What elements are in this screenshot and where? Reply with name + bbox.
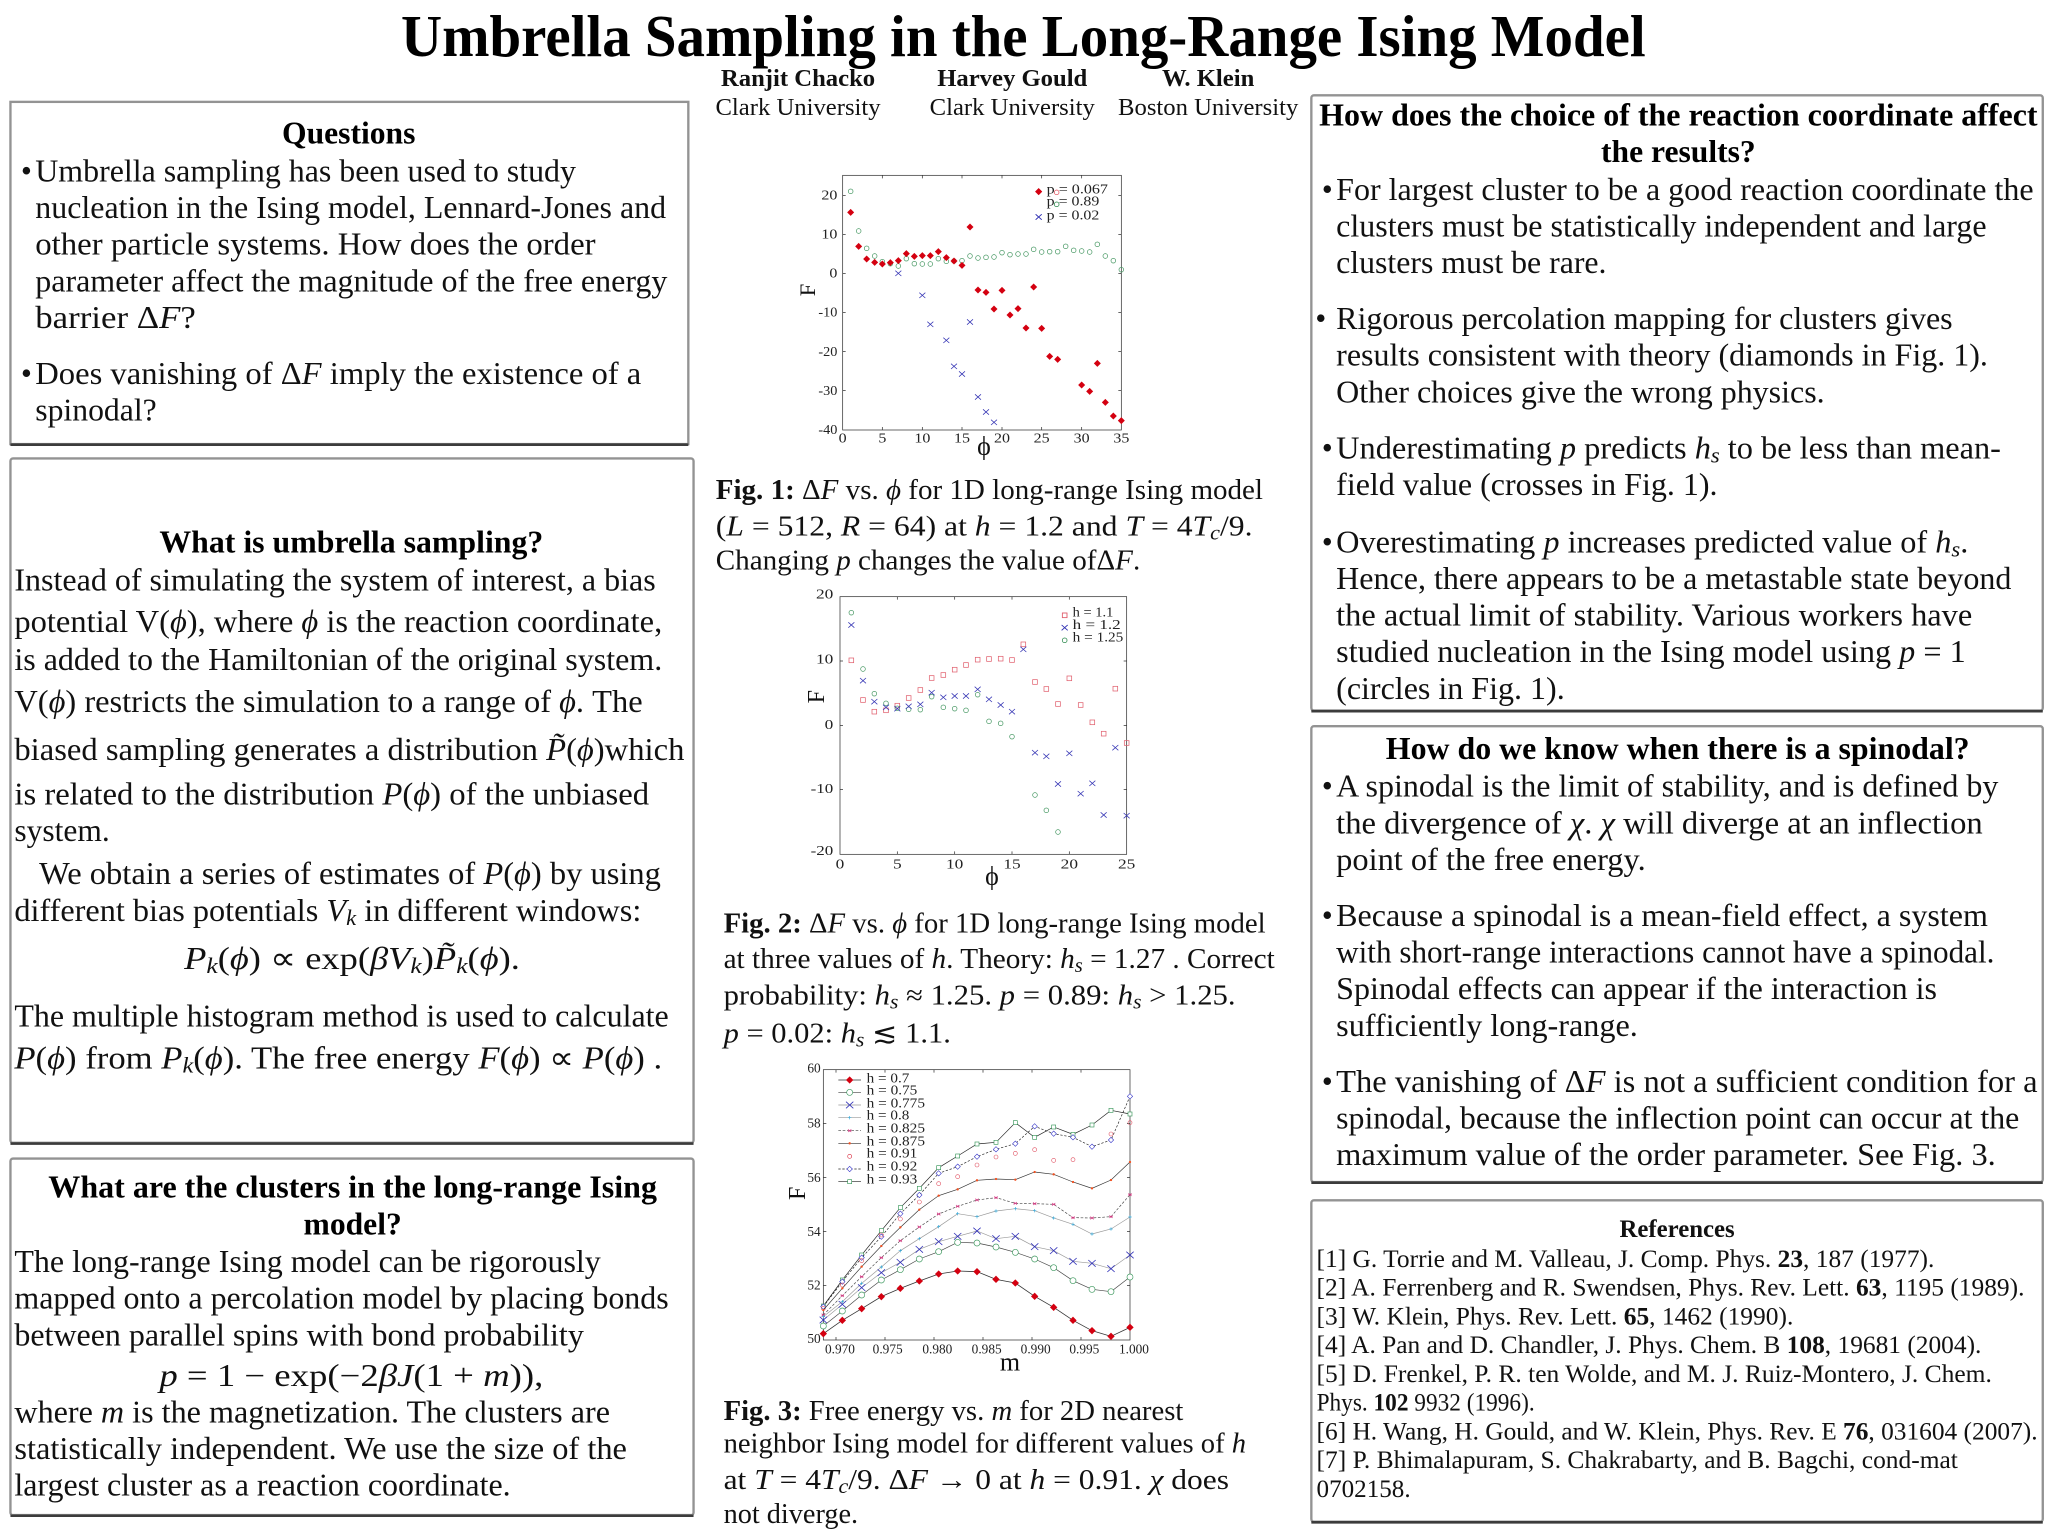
caption: figure 3: neighbor Ising model for different values of h bbox=[724, 1428, 1246, 1459]
panel: questions: • bbox=[21, 154, 32, 189]
figure 2 scatter chart: 15 bbox=[1003, 856, 1021, 871]
figure 1 scatter chart: ϕ bbox=[977, 432, 991, 461]
figure 3 line chart: 58 bbox=[807, 1115, 821, 1130]
figure 3 line chart: 0.985 bbox=[972, 1341, 1002, 1356]
figure 1 scatter chart: p = 0.89 bbox=[1047, 194, 1100, 209]
panel: spinodal: sufficiently long-range. bbox=[1336, 1008, 1638, 1043]
figure 2 scatter chart: h = 1.2 bbox=[1073, 617, 1121, 632]
panel: reaction coordinate: (circles in Fig. 1). bbox=[1336, 671, 1565, 706]
figure 3 line chart: 52 bbox=[807, 1278, 821, 1293]
panel: references bbox=[1311, 1200, 2043, 1522]
panel: clusters: statistically independent. We use the size of the bbox=[14, 1431, 627, 1466]
panel: spinodal: spinodal, because the inflection point can occur at the bbox=[1336, 1100, 2019, 1135]
panel: what is umbrella sampling: Instead of simulating the system of interest, a bias bbox=[14, 562, 656, 597]
panel: reaction coordinate: Hence, there appears to be a metastable state beyond bbox=[1336, 561, 2012, 596]
panel: what is umbrella sampling: We obtain a series of estimates of P(ϕ) by using bbox=[39, 856, 661, 891]
figure 1 scatter chart: 10 bbox=[821, 227, 838, 242]
panel: questions: • bbox=[21, 356, 32, 391]
panel: questions bbox=[10, 102, 688, 445]
panel: spinodal bbox=[1311, 726, 2043, 1183]
caption: figure 2 bbox=[721, 909, 1275, 1051]
figure 3 line chart: 0.970 bbox=[825, 1341, 855, 1356]
figure 1 scatter chart: -10 bbox=[818, 305, 838, 320]
panel: questions: other particle systems. How does the order bbox=[35, 227, 596, 262]
panel: clusters: What are the clusters in the long-range Ising bbox=[48, 1170, 657, 1205]
caption: figure 1: Changing p changes the value ofΔ F. bbox=[716, 545, 1140, 576]
panel: questions: Questions bbox=[282, 116, 415, 151]
figure 2 scatter chart: 25 bbox=[1118, 856, 1136, 871]
panel: reaction coordinate: studied nucleation in the Ising model using p = 1 bbox=[1336, 634, 1966, 669]
panel: what is umbrella sampling: different bias potentials Vk in different windows: bbox=[14, 893, 641, 930]
panel: clusters: model? bbox=[304, 1206, 402, 1241]
figure 1 scatter chart: 35 bbox=[1113, 431, 1130, 446]
panel: reaction coordinate: the actual limit of stability. Various workers have bbox=[1336, 598, 1972, 633]
panel: reaction coordinate: • bbox=[1322, 524, 1333, 559]
panel: questions: Umbrella sampling has been used to study bbox=[35, 154, 576, 189]
panel: questions: spinodal? bbox=[35, 393, 157, 428]
figure 2 scatter chart: h = 1.25 bbox=[1073, 630, 1124, 645]
figure 3 line chart: 54 bbox=[807, 1224, 821, 1239]
panel: references: Phys. 102 9932 (1996). bbox=[1317, 1390, 1535, 1417]
panel: spinodal: with short-range interactions cannot have a spinodal. bbox=[1336, 935, 1994, 970]
panel: clusters: The long-range Ising model can be rigorously bbox=[14, 1244, 601, 1279]
panel: questions: barrier Δ F? bbox=[35, 300, 196, 335]
authors: Clark University bbox=[715, 94, 881, 121]
figure 1 scatter chart: -40 bbox=[818, 422, 838, 437]
panel: questions: Does vanishing of Δ F imply the existence of a bbox=[35, 356, 641, 391]
panel: reaction coordinate: • bbox=[1322, 172, 1333, 207]
figure 1 scatter chart: -20 bbox=[818, 344, 838, 359]
title: Umbrella Sampling in the Long-Range Ising Model bbox=[401, 4, 1646, 69]
figure 3 line chart: F bbox=[785, 1187, 811, 1200]
panel: spinodal: the divergence of χ. χ will diverge at an inflection bbox=[1336, 805, 1983, 840]
panel: questions: parameter affect the magnitude of the free energy bbox=[35, 263, 668, 298]
panel: references: [4] A. Pan and D. Chandler, J. Phys. Chem. B 108, 19681 (2004). bbox=[1317, 1332, 1981, 1359]
caption: figure 1: Fig. 1: ΔF vs. ϕ for 1D long-range Ising model bbox=[716, 475, 1263, 506]
figure 1 scatter chart: 15 bbox=[954, 431, 970, 446]
panel: clusters: p = 1 − exp(−2 βJ(1 + m)), bbox=[157, 1358, 543, 1393]
figure 2 scatter chart: 20 bbox=[1061, 856, 1078, 871]
panel: what is umbrella sampling: The multiple histogram method is used to calculate bbox=[14, 999, 669, 1034]
panel: clusters: between parallel spins with bond probability bbox=[14, 1317, 584, 1352]
panel: reaction coordinate: Underestimating p predicts hs to be less than mean- bbox=[1336, 430, 2001, 467]
authors: W. Klein bbox=[1162, 65, 1255, 92]
figure 2 scatter chart: 20 bbox=[816, 586, 834, 601]
caption: figure 2: p = 0.02: hs ≲ 1.1. bbox=[721, 1018, 951, 1051]
figure 3 line chart: h = 0.825 bbox=[867, 1120, 925, 1135]
panel: clusters: largest cluster as a reaction coordinate. bbox=[14, 1468, 511, 1503]
panel: what is umbrella sampling: What is umbrella sampling? bbox=[159, 524, 543, 559]
caption: figure 1: (L = 512, R = 64) at h = 1.2 and T = 4 Tc/9. bbox=[716, 512, 1253, 544]
figure 2 scatter chart: h = 1.1 bbox=[1073, 605, 1113, 620]
panel: references: [5] D. Frenkel, P. R. ten Wolde, and M. J. Ruiz-Montero, J. Chem. bbox=[1317, 1361, 1992, 1388]
panel: what is umbrella sampling: P(ϕ) from Pk(ϕ). The free energy F(ϕ) ∝ P(ϕ) . bbox=[13, 1040, 662, 1077]
panel: references: References bbox=[1619, 1216, 1735, 1243]
panel: what is umbrella sampling: V(ϕ) restricts the simulation to a range of ϕ. The bbox=[14, 684, 643, 719]
figure 3 line chart: 0.995 bbox=[1069, 1341, 1100, 1356]
figure 1 scatter chart: 20 bbox=[994, 431, 1010, 446]
figure 3 line chart: 0.990 bbox=[1021, 1341, 1051, 1356]
panel: what is umbrella sampling: Pk(ϕ) ∝ exp( βV k)P̃k(ϕ). bbox=[183, 941, 520, 978]
panel: what is umbrella sampling: potential V(ϕ), where ϕ is the reaction coordinate, bbox=[14, 604, 662, 639]
panel: reaction coordinate: Overestimating p increases predicted value of hs. bbox=[1336, 524, 1968, 561]
panel: what is umbrella sampling: biased sampling generates a distribution P̃(ϕ)which bbox=[14, 732, 685, 767]
figure 2 scatter chart: 10 bbox=[946, 856, 964, 871]
caption: figure 2: at three values of h. Theory: hs = 1.27 . Correct bbox=[724, 944, 1275, 976]
figure 1 scatter chart: 25 bbox=[1034, 431, 1050, 446]
panel: clusters: where m is the magnetization. The clusters are bbox=[14, 1394, 610, 1429]
panel: references: [2] A. Ferrenberg and R. Swendsen, Phys. Rev. Lett. 63, 1195 (1989). bbox=[1317, 1275, 2024, 1302]
authors: Ranjit Chacko bbox=[721, 65, 875, 92]
authors bbox=[715, 65, 1299, 121]
figure 2 scatter chart: 0 bbox=[836, 856, 845, 871]
panel: spinodal: point of the free energy. bbox=[1336, 842, 1646, 877]
panel: references: 0702158. bbox=[1317, 1476, 1411, 1503]
figure 3 line chart: 1.000 bbox=[1119, 1341, 1149, 1356]
panel: reaction coordinate: clusters must be rare. bbox=[1336, 245, 1607, 280]
figure 3 line chart: h = 0.7 bbox=[867, 1070, 910, 1085]
figure 3 line chart: h = 0.8 bbox=[867, 1108, 910, 1123]
caption: figure 3: at T = 4Tc/9. Δ F → 0 at h = 0.91. χ does bbox=[724, 1465, 1229, 1498]
figure 3 line chart: m bbox=[1000, 1348, 1020, 1377]
figure 2 scatter chart bbox=[804, 586, 1136, 890]
panel: references: [7] P. Bhimalapuram, S. Chakrabarty, and B. Bagchi, cond-mat bbox=[1317, 1447, 1958, 1474]
panel: questions: nucleation in the Ising model, Lennard-Jones and bbox=[35, 190, 666, 225]
figure 3 line chart: h = 0.75 bbox=[867, 1083, 918, 1098]
figure 3 line chart: h = 0.92 bbox=[867, 1159, 917, 1174]
figure 2 scatter chart: 5 bbox=[893, 856, 902, 871]
figure 2 scatter chart: 0 bbox=[825, 717, 834, 732]
figure 1 scatter chart: 30 bbox=[1074, 431, 1090, 446]
panel: spinodal: Because a spinodal is a mean-field effect, a system bbox=[1336, 898, 1988, 933]
figure 1 scatter chart: 20 bbox=[821, 188, 838, 203]
panel: references: [3] W. Klein, Phys. Rev. Lett. 65, 1462 (1990). bbox=[1317, 1303, 1793, 1330]
figure 3 line chart: 60 bbox=[807, 1061, 821, 1076]
panel: references: [1] G. Torrie and M. Valleau, J. Comp. Phys. 23, 187 (1977). bbox=[1317, 1246, 1934, 1273]
panel: reaction coordinate bbox=[1311, 95, 2043, 711]
figure 1 scatter chart: 5 bbox=[878, 431, 887, 446]
panel: reaction coordinate: Other choices give the wrong physics. bbox=[1336, 374, 1825, 409]
caption: figure 2: Fig. 2: ΔF vs. ϕ for 1D long-range Ising model bbox=[724, 909, 1266, 940]
panel: reaction coordinate: clusters must be statistically independent and large bbox=[1336, 208, 1987, 243]
panel: clusters: mapped onto a percolation model by placing bonds bbox=[14, 1281, 669, 1316]
figure 2 scatter chart: -20 bbox=[811, 843, 834, 858]
authors: Boston University bbox=[1118, 94, 1299, 121]
caption: figure 3: Fig. 3: Free energy vs. m for 2D nearest bbox=[724, 1396, 1184, 1427]
figure 1 scatter chart: p = 0.02 bbox=[1047, 207, 1099, 222]
panel: spinodal: • bbox=[1322, 1064, 1333, 1099]
authors: Clark University bbox=[930, 94, 1095, 121]
caption: figure 3 bbox=[724, 1396, 1246, 1530]
authors: Harvey Gould bbox=[937, 65, 1088, 92]
panel: reaction coordinate: results consistent with theory (diamonds in Fig. 1). bbox=[1336, 338, 1988, 373]
panel: reaction coordinate: • bbox=[1315, 301, 1326, 336]
panel: reaction coordinate: How does the choice of the reaction coordinate affect bbox=[1319, 97, 2038, 132]
figure 1 scatter chart: p = 0.067 bbox=[1047, 181, 1108, 196]
panel: what is umbrella sampling: system. bbox=[14, 813, 110, 848]
figure 1 scatter chart: 10 bbox=[914, 431, 931, 446]
panel: clusters bbox=[10, 1159, 694, 1516]
panel: references: [6] H. Wang, H. Gould, and W. Klein, Phys. Rev. E 76, 031604 (2007). bbox=[1317, 1418, 2038, 1445]
caption: figure 3: not diverge. bbox=[724, 1499, 858, 1530]
panel: spinodal: Spinodal effects can appear if the interaction is bbox=[1336, 971, 1937, 1006]
panel: reaction coordinate: the results? bbox=[1601, 134, 1756, 169]
panel: reaction coordinate: field value (crosses in Fig. 1). bbox=[1336, 467, 1718, 502]
figure 2 scatter chart: F bbox=[804, 690, 830, 703]
panel: reaction coordinate: Rigorous percolation mapping for clusters gives bbox=[1336, 301, 1953, 336]
figure 1 scatter chart: 0 bbox=[839, 431, 847, 446]
figure 3 line chart: 0.975 bbox=[873, 1341, 903, 1356]
figure 1 scatter chart: -30 bbox=[818, 383, 838, 398]
figure 3 line chart: h = 0.875 bbox=[867, 1133, 925, 1148]
panel: spinodal: maximum value of the order parameter. See Fig. 3. bbox=[1336, 1137, 1996, 1172]
panel: reaction coordinate: For largest cluster to be a good reaction coordinate the bbox=[1336, 172, 2034, 207]
figure 3 line chart bbox=[785, 1061, 1149, 1377]
panel: spinodal: • bbox=[1322, 898, 1333, 933]
panel: spinodal: How do we know when there is a spinodal? bbox=[1386, 731, 1970, 766]
figure 3 line chart: h = 0.775 bbox=[867, 1095, 925, 1110]
figure 3 line chart: h = 0.93 bbox=[867, 1171, 918, 1186]
figure 1 scatter chart: F bbox=[795, 284, 820, 296]
panel: reaction coordinate: • bbox=[1322, 430, 1333, 465]
figure 2 scatter chart: -10 bbox=[811, 781, 834, 796]
caption: figure 1 bbox=[716, 475, 1263, 576]
figure 3 line chart: h = 0.91 bbox=[867, 1146, 917, 1161]
panel: spinodal: • bbox=[1322, 769, 1333, 804]
figure 3 line chart: 0.980 bbox=[922, 1341, 953, 1356]
panel: what is umbrella sampling: is added to the Hamiltonian of the original system. bbox=[14, 642, 662, 677]
figure 2 scatter chart: ϕ bbox=[985, 861, 999, 890]
panel: spinodal: The vanishing of Δ F is not a sufficient condition for a bbox=[1336, 1064, 2038, 1099]
panel: what is umbrella sampling: is related to the distribution P(ϕ) of the unbiased bbox=[14, 777, 649, 812]
panel: spinodal: A spinodal is the limit of stability, and is defined by bbox=[1336, 769, 1999, 804]
figure 2 scatter chart: 10 bbox=[816, 652, 834, 667]
panel: what is umbrella sampling bbox=[10, 458, 694, 1144]
figure 3 line chart: 50 bbox=[807, 1331, 821, 1346]
figure 3 line chart: 56 bbox=[807, 1170, 821, 1185]
figure 1 scatter chart bbox=[795, 175, 1130, 461]
figure 1 scatter chart: 0 bbox=[829, 266, 838, 281]
caption: figure 2: probability: hs ≈ 1.25. p = 0.89: hs > 1.25. bbox=[724, 980, 1236, 1013]
